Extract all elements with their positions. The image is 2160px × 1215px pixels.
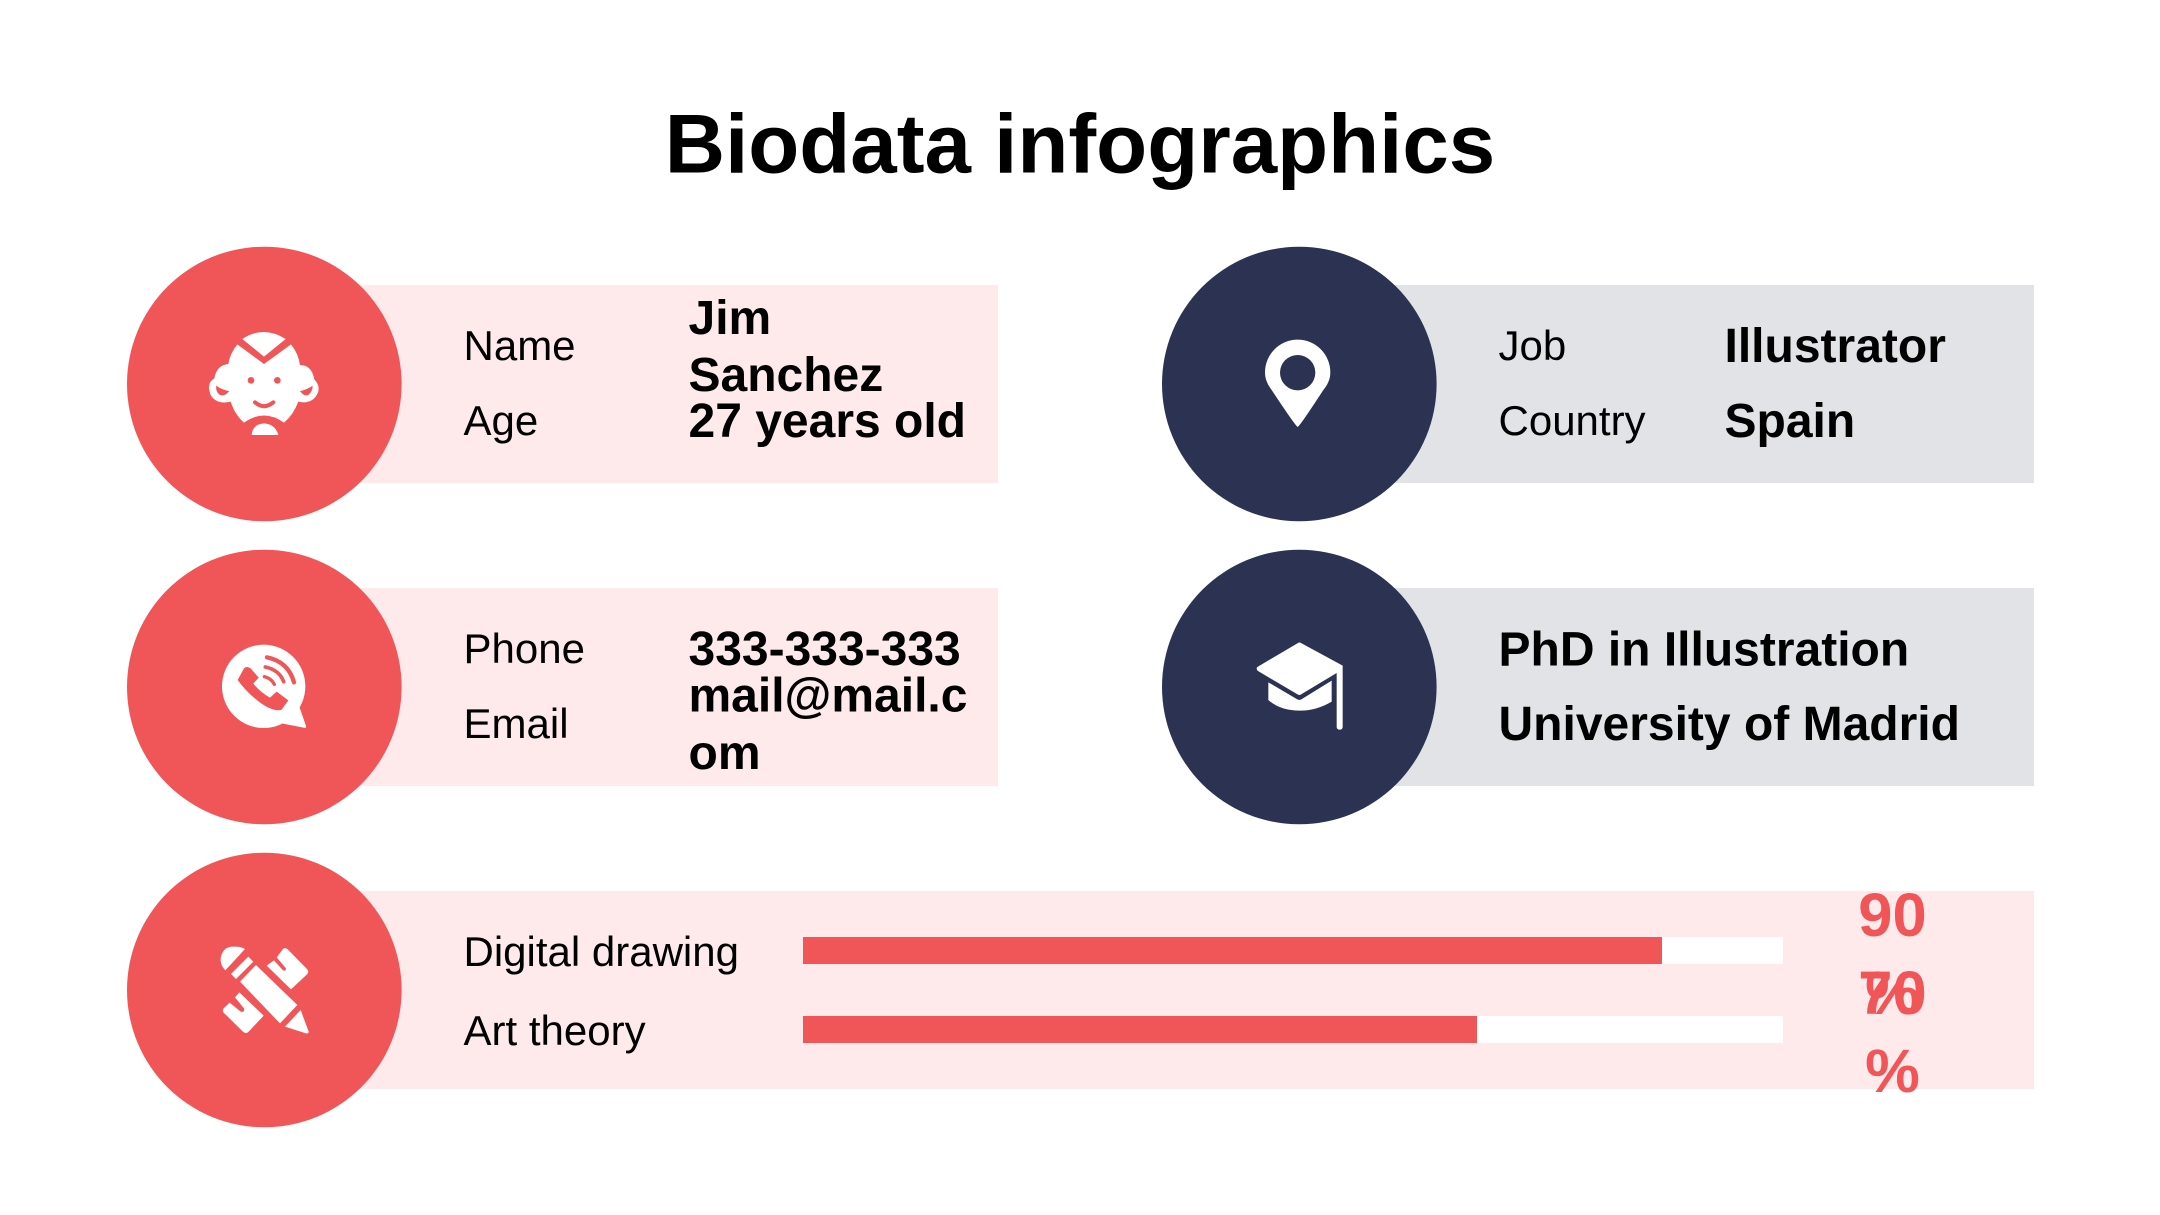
text: degree: PhD in Illustration	[1498, 624, 1909, 676]
value: phone: 333-333-333	[688, 623, 961, 676]
label: digital drawing: Digital drawing	[464, 928, 739, 975]
bar: art theory	[803, 1016, 1783, 1043]
circle: contact	[127, 550, 402, 824]
icon: graduation cap	[1257, 642, 1343, 730]
icon: face	[209, 332, 319, 435]
icon: pencil and ruler	[221, 947, 309, 1033]
bar: digital drawing	[803, 937, 1783, 964]
value: job: Illustrator	[1724, 320, 1946, 373]
title: Biodata infographics	[665, 96, 1495, 190]
circle: education	[1162, 550, 1437, 824]
value: art theory percent: 70	[1858, 959, 1927, 1028]
label: name: Name	[464, 322, 576, 369]
panel: skills	[127, 853, 2034, 1127]
value: email: om	[688, 727, 760, 780]
value: digital drawing percent: %	[1865, 959, 1920, 1028]
panel: personal info	[127, 247, 998, 521]
label: art theory: Art theory	[464, 1007, 646, 1054]
icon: phone speech bubble	[222, 645, 306, 728]
panel: job info	[1162, 247, 2034, 521]
value: age: 27 years old	[688, 395, 966, 448]
label: age: Age	[464, 397, 538, 444]
panel: education	[1162, 550, 2034, 824]
icon: location pin	[1265, 340, 1330, 427]
circle: skills	[127, 853, 402, 1127]
circle: personal	[127, 247, 402, 521]
value: email: mail@mail.c	[688, 670, 967, 722]
label: job: Job	[1498, 322, 1566, 369]
value: name: Jim	[688, 292, 771, 345]
label: phone: Phone	[464, 625, 585, 672]
text: university: University of Madrid	[1498, 698, 1960, 751]
value: art theory percent: %	[1865, 1037, 1920, 1106]
label: email: Email	[464, 700, 569, 747]
value: digital drawing percent: 90	[1858, 881, 1927, 950]
value: country: Spain	[1724, 395, 1855, 448]
value: name: Sanchez	[688, 349, 883, 402]
panel: contact info	[127, 550, 998, 824]
label: country: Country	[1498, 397, 1646, 444]
circle: job	[1162, 247, 1437, 521]
